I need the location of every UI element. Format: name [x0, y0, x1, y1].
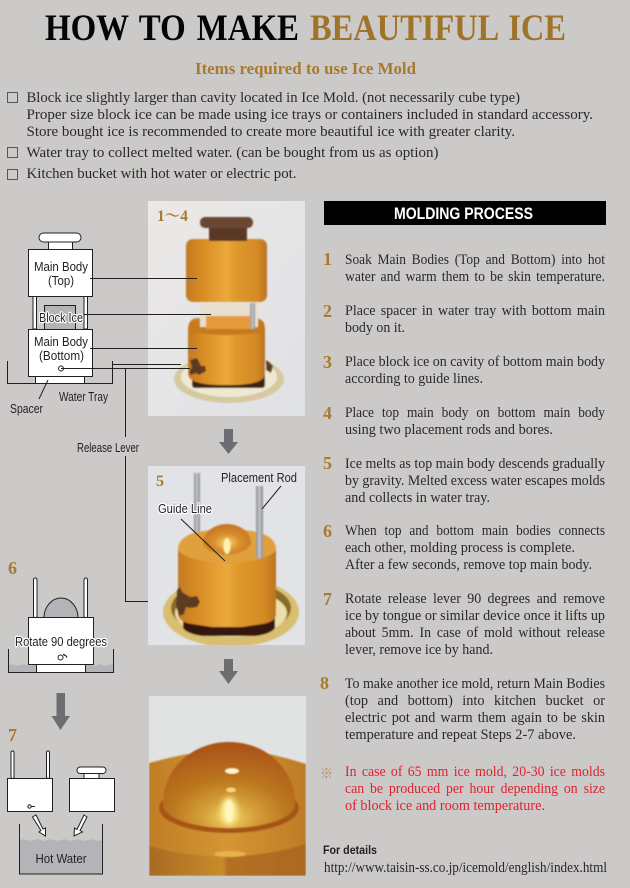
label: guide line: Guide Line	[158, 501, 212, 516]
step 6: When top and bottom main bodies connects	[345, 523, 605, 539]
step 5: 5	[323, 453, 332, 473]
step label 6: 6	[8, 558, 17, 578]
checklist item: kitchen bucket: Kitchen bucket with hot water or electric pot.	[26, 166, 296, 182]
step 5: and collects in water tray.	[345, 490, 490, 506]
water in tray	[9, 664, 113, 672]
step label 7: 7	[8, 725, 17, 745]
bottom body with rods	[8, 751, 52, 812]
photo: step 5	[148, 466, 305, 647]
step 6: 6	[323, 521, 332, 541]
hot water bucket: Hot Water	[36, 851, 87, 866]
part: neck	[48, 242, 72, 250]
arrow: photo 1 to photo 2	[219, 429, 238, 454]
note in red: of block ice and room temperature.	[345, 798, 545, 814]
step 3: Place block ice on cavity of bottom main body	[345, 354, 606, 370]
block ice shape	[44, 306, 76, 330]
step 1: water and warm them to be skin temperature.	[345, 269, 605, 285]
arrow: photo 2 to photo 3	[219, 659, 238, 684]
hot water bucket	[20, 824, 102, 874]
main body top: (Top)	[48, 273, 74, 288]
main body	[28, 618, 94, 664]
rods and ice dome	[34, 578, 88, 618]
top body with knob	[70, 767, 114, 812]
step 3: according to guide lines.	[345, 371, 483, 387]
step 4: using two placement rods and bores.	[345, 422, 553, 438]
step 4	[323, 403, 606, 438]
spacer	[36, 664, 86, 672]
step 1: 1	[323, 249, 332, 269]
placement rods	[33, 296, 88, 329]
tray	[8, 649, 114, 672]
label: placement rod: Placement Rod	[221, 470, 297, 485]
label: block ice: Block Ice	[39, 310, 83, 325]
label: release lever: Release Lever	[77, 440, 139, 455]
main body bottom: (Bottom)	[39, 348, 84, 363]
step 8: electric pot and warm them again to be skin	[345, 710, 606, 726]
step label 5: 5	[156, 473, 164, 490]
leader lines	[181, 486, 281, 561]
main body top	[28, 250, 92, 296]
label: water tray: Water Tray	[59, 389, 108, 404]
main body bottom	[28, 330, 92, 376]
step 2: Place spacer in water tray with bottom main	[345, 303, 606, 319]
step 8	[320, 673, 606, 743]
step 8: 8	[320, 673, 329, 693]
icon: rotating lever	[58, 654, 67, 660]
step 7: Rotate release lever 90 degrees and remove	[345, 591, 605, 607]
main body bottom: Main Body	[34, 334, 88, 349]
step 6: each other, molding process is complete.	[345, 540, 575, 556]
step 7: about 5mm. In case of mold without release	[345, 625, 605, 641]
checklist item: water tray: Water tray to collect melted water. (can be bought from us as option)	[26, 145, 439, 161]
step 5: by gravity. Melted excess water escapes molds	[345, 473, 605, 489]
note in red: can be produced per hour depending on size	[345, 781, 605, 797]
step 8: temperature and repeat Steps 2-7 above.	[345, 727, 576, 743]
diagram: step 6	[8, 558, 114, 672]
step 1: Soak Main Bodies (Top and Bottom) into hot	[345, 252, 605, 268]
title	[45, 8, 566, 49]
water tray	[8, 361, 112, 384]
spacer	[36, 376, 84, 384]
step 6: After a few seconds, remove top main body.	[345, 557, 592, 573]
main body top: Main Body	[34, 259, 88, 274]
step 3: 3	[323, 352, 332, 372]
photo: finished ice dome	[149, 696, 306, 876]
step 4: Place top main body on bottom main body	[345, 405, 606, 421]
heading bar: molding process: MOLDING PROCESS	[394, 205, 533, 223]
step 4: 4	[323, 403, 332, 423]
arrow: step 6 to step 7	[52, 693, 70, 730]
diagram: mold parts	[8, 233, 211, 602]
step 8: To make another ice mold, return Main Bodies	[345, 676, 605, 692]
step 7: ice by tongue or similar device once it lifts up	[345, 608, 605, 624]
checklist of required items	[8, 90, 593, 182]
note in red: In case of 65 mm ice mold, 20-30 ice molds	[345, 764, 605, 780]
for details link: For details	[323, 843, 377, 857]
step 2	[323, 301, 606, 336]
step 7: 7	[323, 589, 332, 609]
part: knob	[39, 233, 81, 242]
diagram: step 7	[8, 725, 114, 874]
note in red: ※	[320, 766, 333, 781]
step 7: lever, remove ice by hand.	[345, 642, 493, 658]
title: BEAUTIFUL ICE	[310, 8, 566, 49]
step 1	[323, 249, 605, 285]
step 8: (top and bottom) into kitchen bucket or	[345, 693, 605, 709]
heading bar: molding process	[324, 201, 606, 225]
step 2: body on it.	[345, 320, 405, 336]
note in red	[320, 764, 605, 814]
label: spacer: Spacer	[10, 401, 44, 416]
for details link: http://www.taisin-ss.co.jp/icemold/english/index.html	[324, 860, 607, 876]
for details link	[323, 843, 607, 876]
leader lines	[39, 278, 211, 602]
checklist item: block ice	[8, 90, 593, 140]
step 6	[323, 521, 605, 573]
checklist item: block ice: Store bought ice is recommended to create more beautiful ice with greater clarity.	[26, 124, 515, 140]
heading: items required: Items required to use Ice Mold	[195, 59, 417, 78]
step label 1~4: 1〜4	[157, 208, 188, 225]
step 5	[323, 453, 606, 506]
label: rotate 90 degrees: Rotate 90 degrees	[15, 634, 107, 649]
white arrows into bucket	[32, 815, 87, 836]
step 3	[323, 352, 606, 387]
checklist item: block ice: Proper size block ice can be made using ice trays or containers included in standard accessory.	[26, 107, 593, 123]
photo: steps 1 to 4	[148, 201, 305, 416]
step 7	[323, 589, 605, 658]
step 2: 2	[323, 301, 332, 321]
checklist item: block ice: Block ice slightly larger than cavity located in Ice Mold. (not necessarily cube type)	[26, 90, 520, 106]
step 5: Ice melts as top main body descends gradually	[345, 456, 606, 472]
title: HOW TO MAKE	[45, 8, 299, 49]
